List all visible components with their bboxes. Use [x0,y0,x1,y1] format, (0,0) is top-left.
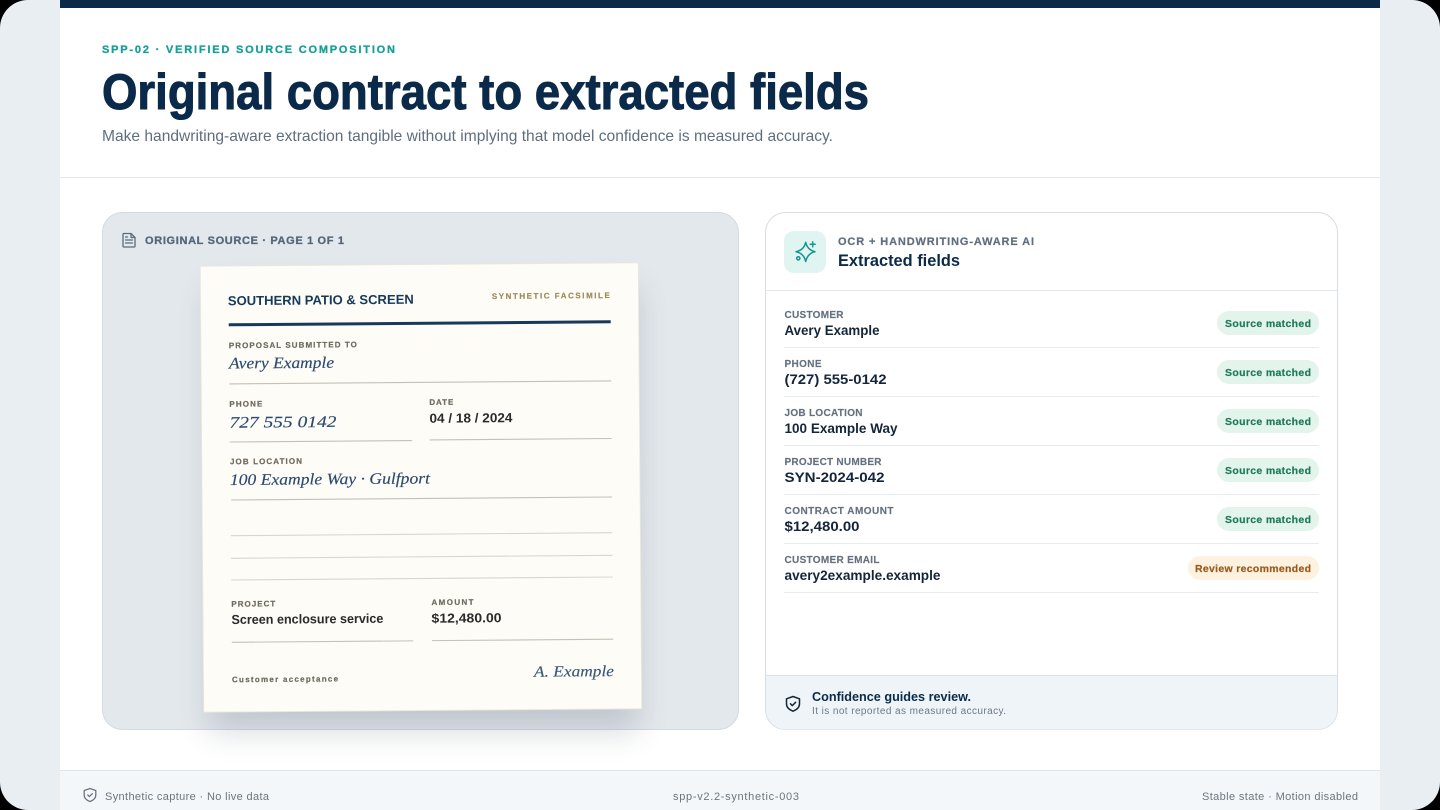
field: amount [431,597,502,626]
row: job location: 100 Example Way [784,421,898,436]
row: phone: (727) 555-0142 [784,372,886,387]
field: phone: PHONE [229,399,263,409]
row: contract amount [784,506,1319,544]
icon: shield [84,788,96,802]
eyebrow: SPP-02 · VERIFIED SOURCE COMPOSITION [102,44,395,56]
row: job location [784,408,1319,446]
field: job location [230,456,431,489]
row: customer: Avery Example [784,323,880,338]
field: date: DATE [429,398,454,407]
field: proposal submitted to [228,340,357,373]
field: job location: 100 Example Way · Gulfport [230,470,431,489]
icon: document [123,234,135,247]
panel heading: Extracted fields [838,251,960,270]
contract facsimile [200,263,642,712]
row: customer email: CUSTOMER EMAIL [784,555,880,566]
confidence note: It is not reported as measured accuracy. [812,706,1006,717]
field: phone [229,399,337,432]
row: job location: JOB LOCATION [784,408,862,419]
row: project number: SYN-2024-042 [784,470,884,485]
field: job location: JOB LOCATION [230,457,302,466]
confidence note [766,675,1337,730]
field: date [429,397,513,426]
icon: shield check [786,696,800,711]
panel: original source [102,212,738,730]
row: customer [784,310,1319,348]
row: customer email: avery2example.example [784,568,941,583]
footer: spp-v2.2-synthetic-003 [673,791,799,803]
field: project: Screen enclosure service [231,611,383,627]
row: project number: PROJECT NUMBER [784,457,882,468]
row: phone [784,359,1319,397]
customer acceptance: Customer acceptance [232,674,339,684]
row: project number [784,457,1319,495]
footer: Stable state · Motion disabled [1202,791,1358,803]
row: phone: Source matched [1225,367,1311,379]
top accent bar [60,0,1380,8]
footer [60,770,1380,810]
field: project [231,598,383,627]
panel heading [838,236,1034,270]
row: project number: Source matched [1225,465,1311,477]
field: proposal submitted to: PROPOSAL SUBMITTED TO [229,340,357,350]
panel heading: OCR + HANDWRITING-AWARE AI [838,236,1034,248]
panel: extracted fields [766,212,1338,730]
row: customer: Source matched [1225,318,1311,330]
signature: A. Example [533,663,614,681]
row: contract amount: CONTRACT AMOUNT [784,506,894,517]
icon: sparkles [784,231,826,273]
field: date: 04 / 18 / 2024 [429,410,513,426]
row: customer email: Review recommended [1195,563,1311,575]
paper shadow [208,288,638,732]
subtitle: Make handwriting-aware extraction tangible without implying that model confidence is measured accuracy. [102,128,833,145]
field: amount: AMOUNT [431,598,474,607]
row: job location: Source matched [1225,416,1311,428]
row: phone: PHONE [784,359,822,370]
confidence note: Confidence guides review. [812,690,971,704]
footer: Synthetic capture · No live data [105,791,270,803]
header [102,44,869,145]
field: phone: 727 555 0142 [229,414,337,432]
row: customer email [784,555,1319,593]
facsimile tag: SYNTHETIC FACSIMILE [492,291,610,301]
company name: SOUTHERN PATIO & SCREEN [228,292,414,308]
field: proposal submitted to: Avery Example [228,355,334,373]
row: customer: CUSTOMER [784,310,844,321]
field: amount: $12,480.00 [431,610,502,626]
row: contract amount: $12,480.00 [784,519,860,534]
source label: ORIGINAL SOURCE · PAGE 1 OF 1 [145,235,344,247]
field: project: PROJECT [231,599,275,609]
title: Original contract to extracted fields [102,64,869,120]
row: contract amount: Source matched [1225,514,1311,526]
